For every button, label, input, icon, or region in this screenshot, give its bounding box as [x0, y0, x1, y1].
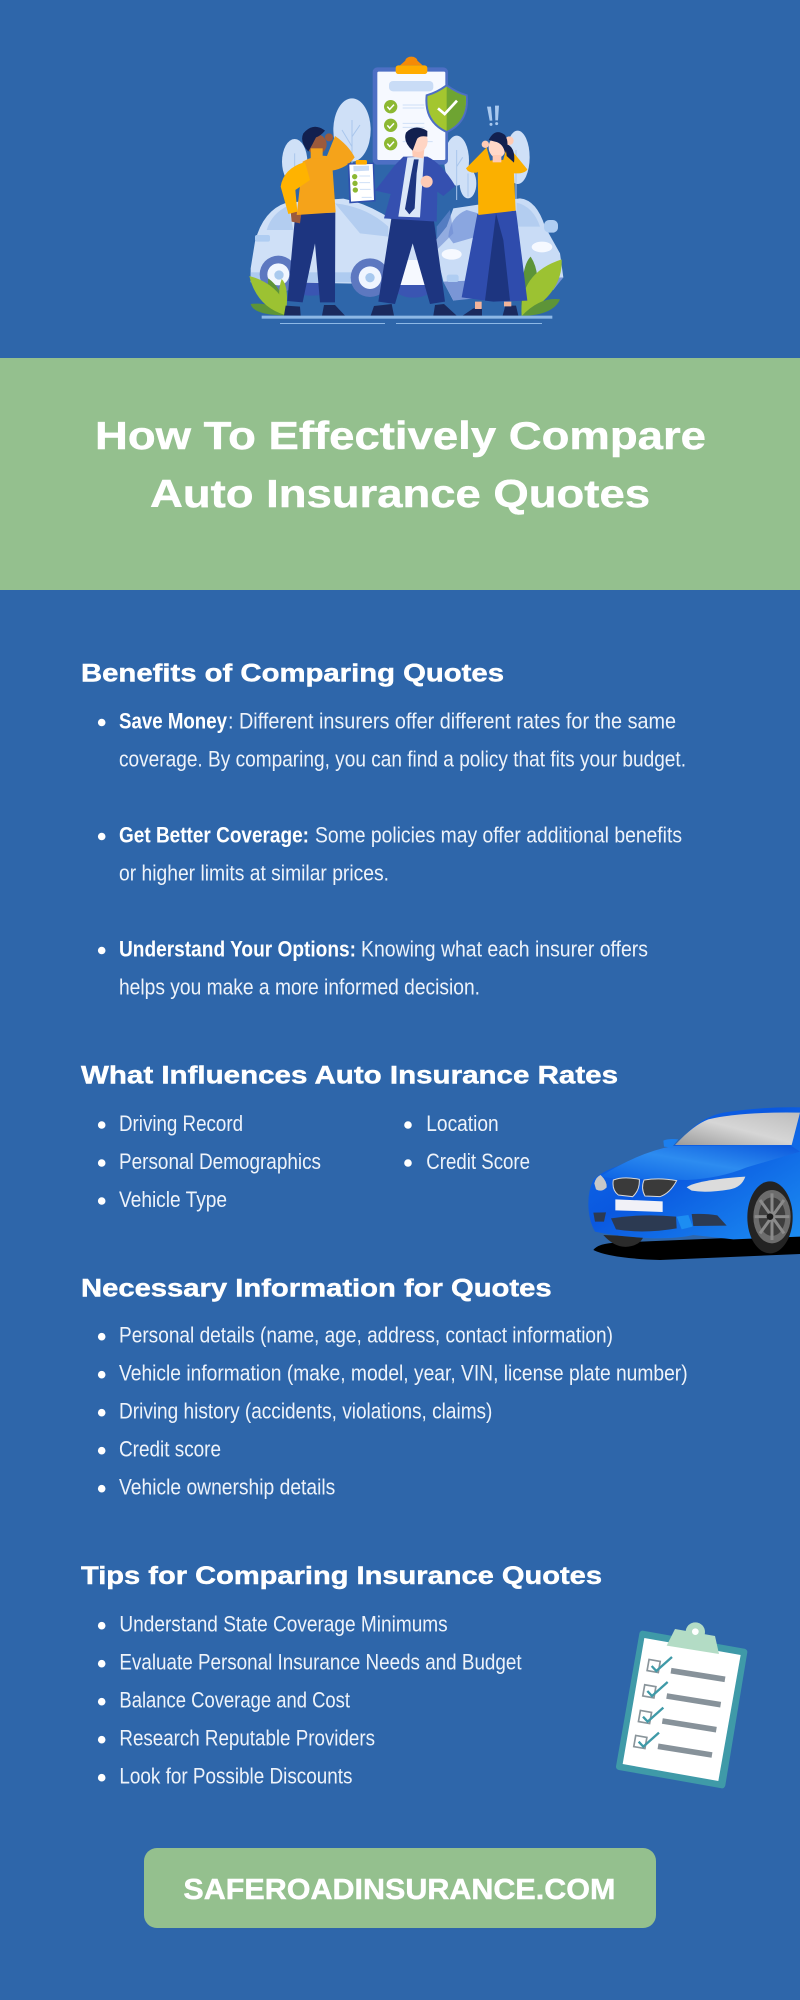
list: tips: Balance Coverage and Cost [119, 1688, 350, 1713]
list: necessary information: Vehicle information (make, model, year, VIN, license plate number) [119, 1361, 688, 1386]
list: tips: Evaluate Personal Insurance Needs and Budget [119, 1650, 522, 1675]
exclamation marks [487, 106, 499, 126]
left car [251, 199, 437, 298]
checkboxes and ticks [634, 1659, 660, 1749]
icon: checklist clipboard [619, 1622, 744, 1785]
heading: benefits: Benefits of Comparing Quotes [81, 660, 504, 688]
person middle: suit [348, 128, 457, 316]
list: necessary information: Personal details (name, age, address, contact information) [119, 1323, 613, 1348]
list: necessary information: Driving history (accidents, violations, claims) [119, 1399, 492, 1424]
benefit: understand options: helps you make a more informed decision. [119, 975, 480, 1000]
list: rate factors [98, 1111, 530, 1212]
list: necessary information: Vehicle ownership details [119, 1475, 335, 1500]
list: rate factors: Driving Record [119, 1111, 243, 1136]
list: tips: Research Reputable Providers [119, 1726, 375, 1751]
website button [144, 1848, 656, 1928]
website url: SAFEROADINSURANCE.COM [183, 1874, 615, 1906]
list: necessary information [98, 1323, 688, 1500]
list: tips [98, 1612, 522, 1789]
trees [282, 98, 530, 203]
title text [95, 415, 706, 516]
shield with check [426, 85, 467, 132]
person left: orange sweater [281, 127, 355, 316]
list: necessary information: Credit score [119, 1437, 221, 1462]
ground lines [262, 316, 552, 324]
title band [0, 358, 800, 590]
car shadow [593, 1235, 800, 1260]
benefit: save money: coverage. By comparing, you can find a policy that fits your budget. [119, 747, 686, 772]
person right: orange top and long skirt [462, 132, 527, 316]
right crashed car [433, 198, 563, 301]
plants [249, 257, 562, 316]
clipboard board [619, 1634, 744, 1785]
benefit: better coverage: or higher limits at similar prices. [119, 861, 389, 886]
benefit: better coverage: Some policies may offer additional benefits [315, 823, 682, 848]
paper [623, 1638, 741, 1781]
large clipboard [373, 57, 448, 165]
benefit: better coverage: Get Better Coverage: [119, 823, 309, 848]
lower grille and vents [611, 1215, 677, 1231]
wheel [747, 1181, 793, 1253]
clip [667, 1622, 719, 1654]
list: tips: Understand State Coverage Minimums [119, 1612, 448, 1637]
heading: what influences rates: What Influences Auto Insurance Rates [81, 1061, 618, 1089]
windshield [675, 1113, 800, 1145]
benefit: understand options: Knowing what each insurer offers [361, 937, 648, 962]
headlights [594, 1175, 607, 1191]
benefit: save money: Save Money [119, 708, 228, 734]
benefit: save money: : Different insurers offer different rates for the same [228, 708, 676, 734]
list: benefits [98, 708, 686, 1000]
list: rate factors: Personal Demographics [119, 1149, 321, 1174]
kidney grille [613, 1178, 639, 1197]
benefit: save money [98, 708, 686, 772]
title text: How To Effectively Compare [95, 415, 706, 458]
list: tips: Look for Possible Discounts [119, 1764, 352, 1789]
title text: Auto Insurance Quotes [150, 473, 650, 516]
heading: necessary information: Necessary Information for Quotes [81, 1275, 552, 1303]
list: rate factors: Location [426, 1111, 499, 1136]
list: rate factors: Credit Score [426, 1149, 530, 1174]
list: rate factors: Vehicle Type [119, 1187, 227, 1212]
car body [588, 1107, 800, 1239]
benefit: understand options: Understand Your Options: [119, 937, 356, 962]
heading: tips: Tips for Comparing Insurance Quotes [81, 1562, 602, 1590]
benefit: understand options [98, 937, 648, 1000]
small clipboard [348, 160, 376, 203]
hero illustration: people with insurance checklist and crashed cars [249, 57, 563, 324]
text bars [658, 1671, 725, 1755]
benefit: better coverage [98, 823, 682, 886]
license plate [615, 1199, 663, 1212]
icon: blue car [588, 1107, 800, 1260]
